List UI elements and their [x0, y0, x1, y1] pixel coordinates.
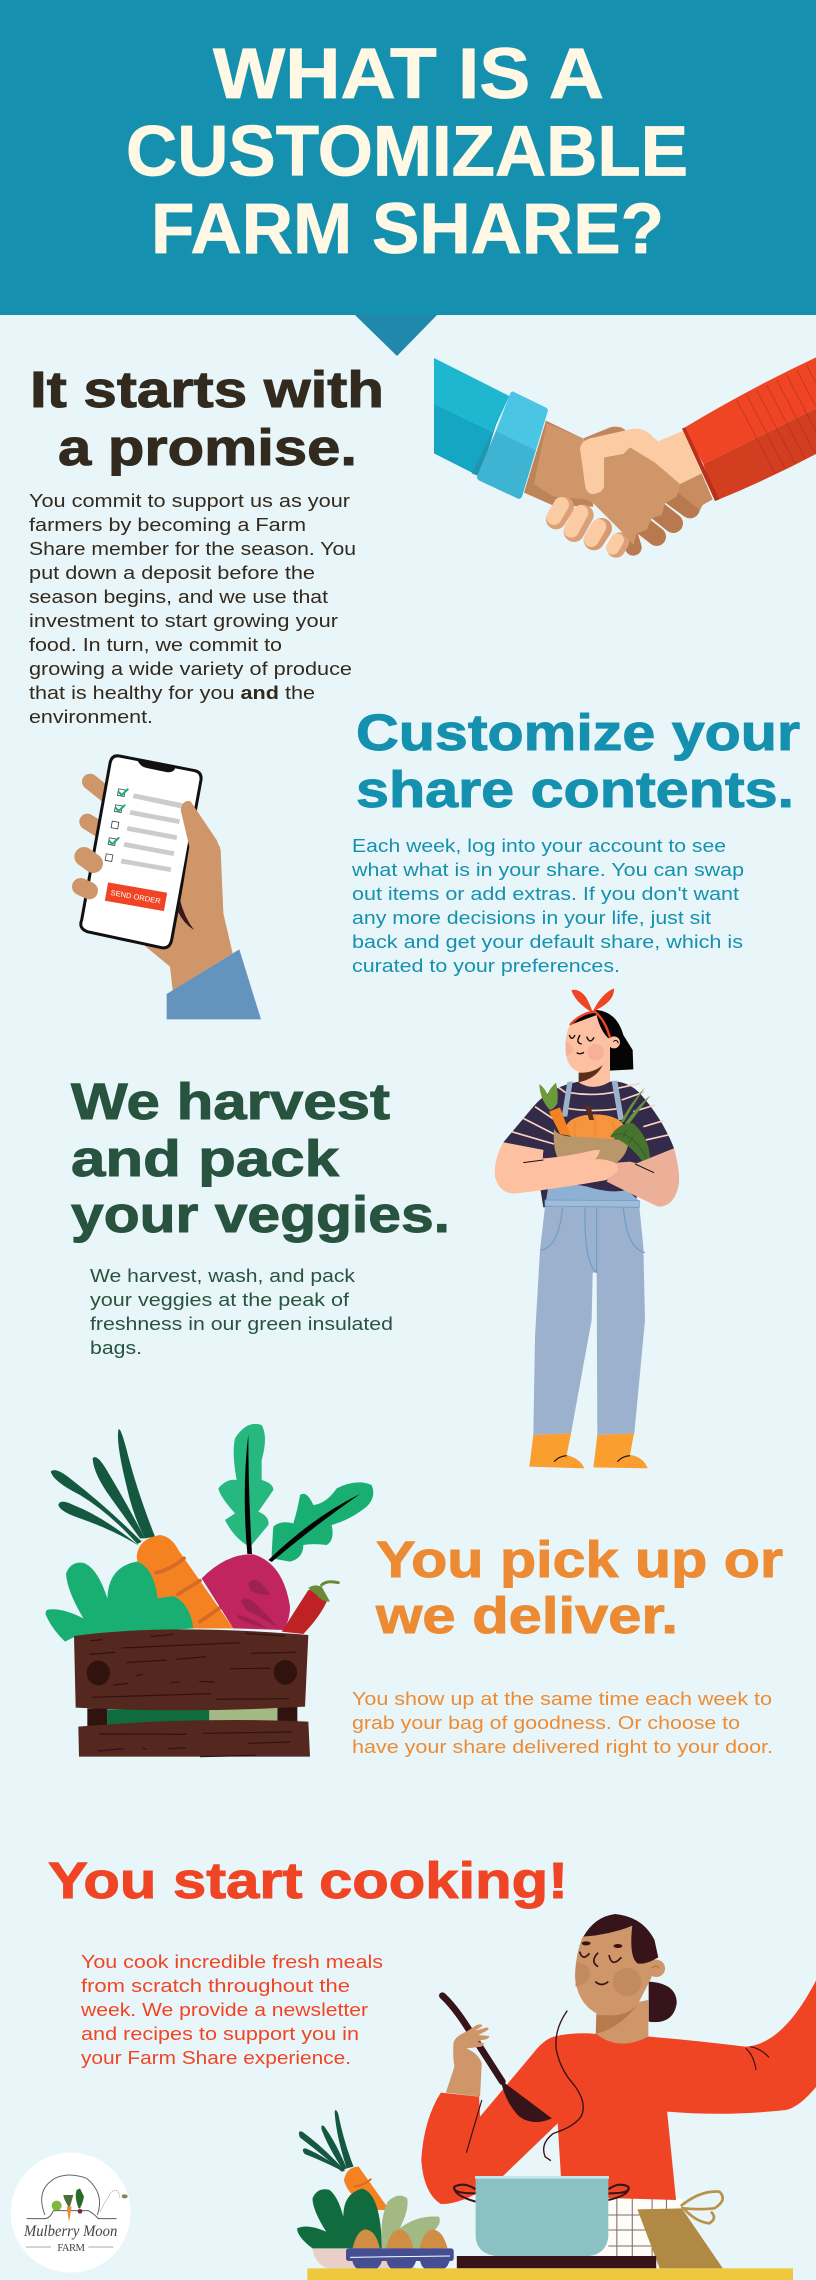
hand — [446, 2024, 489, 2097]
vegetables and eggs — [297, 2110, 454, 2269]
send order button — [105, 882, 167, 911]
title — [126, 35, 688, 269]
text block: promise: You commit to support us as your — [29, 490, 350, 511]
text block: harvest: your veggies at the peak of — [90, 1289, 350, 1310]
text block: promise: investment to start growing your — [29, 610, 338, 631]
heading: it starts with a promise — [30, 361, 384, 476]
send order button: SEND ORDER — [110, 888, 161, 906]
text block: promise: Share member for the season. You — [29, 538, 356, 559]
face — [565, 1015, 610, 1087]
heading: it starts with a promise: It starts with — [30, 361, 384, 418]
text block: customize: back and get your default share, which is — [352, 931, 743, 952]
text block: promise: farmers by becoming a Farm — [29, 514, 306, 535]
vegetables and bag — [539, 1083, 651, 1165]
text block: promise: food. In turn, we commit to — [29, 634, 282, 655]
heading: we harvest and pack your veggies: your veggies. — [71, 1186, 450, 1243]
text block: harvest: We harvest, wash, and pack — [90, 1265, 356, 1286]
text block: cooking: from scratch throughout the — [81, 1975, 350, 1996]
text block: cooking: your Farm Share experience. — [81, 2047, 351, 2068]
phone — [81, 756, 201, 948]
text block: harvest: freshness in our green insulated — [90, 1313, 393, 1334]
text block: customize — [351, 835, 744, 976]
text block: promise: environment. — [29, 706, 153, 727]
heading: customize your share contents: Customize your — [356, 704, 800, 761]
steam — [544, 2011, 583, 2161]
wooden spoon — [442, 1996, 552, 2122]
text block: cooking — [80, 1951, 383, 2068]
icon: hand holding phone — [81, 756, 261, 1019]
heading: we harvest and pack your veggies — [71, 1073, 450, 1243]
heading: we harvest and pack your veggies: We harvest — [71, 1073, 390, 1130]
carrot — [51, 1429, 233, 1628]
text block: customize: out items or add extras. If you don't want — [352, 883, 739, 904]
apron straps — [562, 1081, 624, 1120]
text block: customize: any more decisions in your life, just sit — [352, 907, 711, 928]
icon: crate of vegetables — [45, 1424, 373, 1757]
text block: pick up: have your share delivered right to your door. — [352, 1736, 773, 1757]
heading: customize your share contents — [356, 704, 800, 818]
yellow table — [307, 2268, 793, 2280]
headband — [570, 988, 614, 1037]
text block: promise: season begins, and we use that — [29, 586, 328, 607]
shoes — [529, 1433, 648, 1468]
logo wordmark: Mulberry Moon — [23, 2223, 118, 2240]
chili — [282, 1582, 338, 1634]
text block: harvest — [90, 1265, 393, 1358]
text block: cooking: and recipes to support you in — [81, 2023, 359, 2044]
icon: farmer woman holding vegetables — [495, 988, 679, 1468]
shirt — [503, 1081, 674, 1207]
text block: cooking: You cook incredible fresh meals — [81, 1951, 383, 1972]
leafy greens — [45, 1562, 193, 1642]
pot — [454, 2176, 629, 2256]
text block: customize: Each week, log into your account to see — [352, 835, 726, 856]
beet — [202, 1424, 373, 1630]
icon: woman cooking at stove — [297, 1914, 816, 2280]
overalls — [533, 1185, 645, 1435]
logo wordmark — [23, 2223, 118, 2254]
red sweater — [421, 1980, 816, 2204]
text block: promise: that is healthy for you and the — [29, 682, 315, 703]
header banner — [0, 0, 816, 356]
text block: customize: what what is in your share. You can swap — [351, 859, 744, 880]
title: FARM SHARE? — [151, 190, 664, 269]
text block: cooking: week. We provide a newsletter — [80, 1999, 368, 2020]
text block: customize: curated to your preferences. — [352, 955, 620, 976]
heading: you pick up or we deliver: You pick up or — [376, 1531, 783, 1588]
heading: we harvest and pack your veggies: and pack — [71, 1130, 340, 1187]
heading: you start cooking: You start cooking! — [48, 1852, 568, 1909]
text block: pick up: grab your bag of goodness. Or choose to — [352, 1712, 740, 1733]
hair back — [570, 1010, 633, 1071]
apron — [598, 2192, 723, 2268]
text block: promise: growing a wide variety of produce — [29, 658, 352, 679]
title: CUSTOMIZABLE — [126, 112, 688, 192]
head — [575, 1914, 677, 2045]
logo wordmark: FARM — [57, 2243, 86, 2254]
arms — [495, 1142, 679, 1207]
text block: promise — [29, 490, 356, 727]
title: WHAT IS A — [213, 35, 604, 114]
icon: handshake — [434, 357, 816, 548]
text block: pick up: You show up at the same time each week to — [352, 1688, 772, 1709]
heading: customize your share contents: share contents. — [356, 761, 794, 818]
heading: you pick up or we deliver: we deliver. — [375, 1587, 678, 1644]
text block: promise: put down a deposit before the — [29, 562, 315, 583]
heading: it starts with a promise: a promise. — [58, 419, 357, 476]
logo: Mulberry Moon Farm — [11, 2153, 131, 2273]
text block: pick up — [352, 1688, 773, 1757]
heading: you pick up or we deliver — [375, 1531, 783, 1644]
crate — [74, 1629, 310, 1757]
text block: harvest: bags. — [90, 1337, 142, 1358]
